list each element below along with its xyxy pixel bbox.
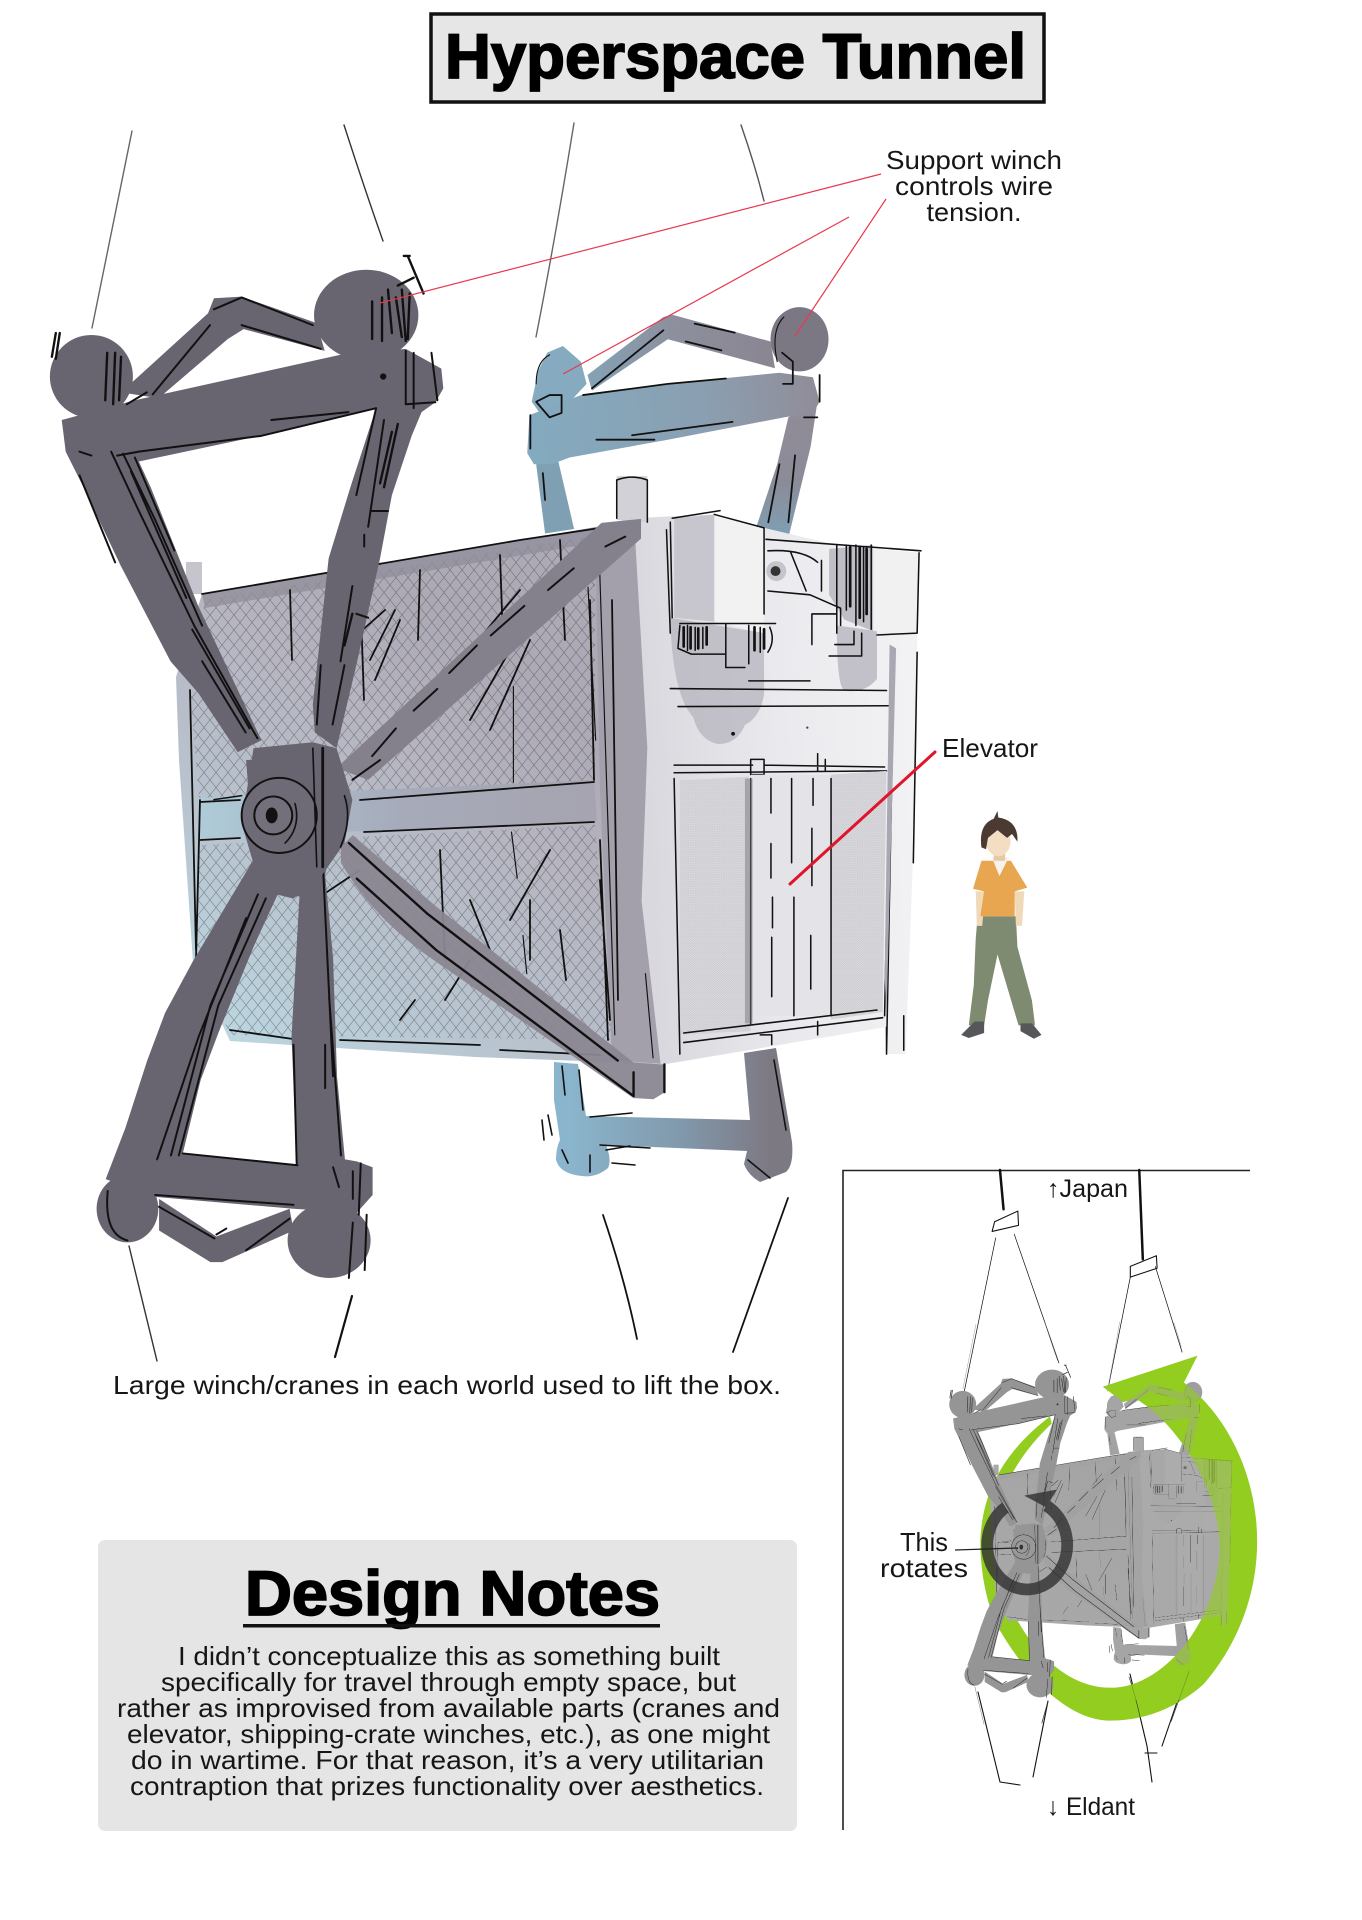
front crane upper frame xyxy=(50,256,443,752)
title: Hyperspace Tunnel xyxy=(445,22,1026,92)
body text: elevator, shipping-crate winches, etc.), as one might xyxy=(127,1719,771,1749)
panel: design notes xyxy=(98,1540,797,1831)
machinery box B xyxy=(837,545,919,635)
leader line xyxy=(955,1548,1018,1550)
heading: design notes: Design Notes xyxy=(245,1559,660,1629)
elevator door center xyxy=(751,775,831,1016)
body text: specifically for travel through empty space, but xyxy=(161,1667,737,1697)
crate right face with elevator door xyxy=(511,476,921,1066)
label: this rotates: This xyxy=(900,1527,948,1557)
crate ink lines xyxy=(190,528,618,1055)
back crane upper section xyxy=(527,307,829,547)
label: Eldant: ↓ Eldant xyxy=(1047,1793,1135,1821)
label: Japan: ↑Japan xyxy=(1047,1175,1128,1203)
shirt xyxy=(973,861,1027,916)
upper frame ink xyxy=(80,297,437,738)
label: support winch: tension. xyxy=(926,197,1022,227)
corner post xyxy=(617,476,647,522)
back crane lower section xyxy=(542,1048,792,1182)
neck and head xyxy=(994,849,1005,861)
lower frame ink xyxy=(107,760,367,1278)
wire cables xyxy=(92,123,788,1361)
callout line: elevator xyxy=(790,752,935,884)
door ink xyxy=(674,648,917,1054)
legs xyxy=(969,916,1035,1025)
green rotation arrow xyxy=(980,1356,1257,1721)
lower diagonal strut xyxy=(341,835,665,1099)
dark hub rotation arrow xyxy=(987,1490,1067,1589)
crate diagonal struts xyxy=(337,519,641,780)
body text xyxy=(117,1641,780,1801)
inset lower cables xyxy=(978,1670,1188,1785)
inset cables xyxy=(964,1170,1182,1391)
caption: Large winch/cranes in each world used to lift the box. xyxy=(113,1370,781,1400)
top rail xyxy=(202,519,643,608)
center hub xyxy=(214,742,352,898)
horizontal band xyxy=(198,780,597,838)
illustration: hyperspace tunnel elevator rig xyxy=(50,123,921,1361)
body text: contraption that prizes functionality over aesthetics. xyxy=(130,1771,764,1801)
corner column xyxy=(595,519,663,1064)
machinery winch xyxy=(766,549,823,595)
machinery hatching xyxy=(666,511,921,775)
hair xyxy=(981,811,1017,849)
callout lines: support winch xyxy=(380,174,886,374)
body text: do in wartime. For that reason, it’s a very utilitarian xyxy=(131,1745,764,1775)
label: support winch: Support winch xyxy=(886,145,1062,175)
label: elevator: Elevator xyxy=(942,733,1038,763)
mesh panels xyxy=(190,535,612,1040)
front crane lower frame xyxy=(97,760,373,1278)
machinery box A xyxy=(674,514,764,633)
body text: I didn’t conceptualize this as something built xyxy=(178,1641,721,1671)
inset grey machine xyxy=(949,1322,1232,1724)
label: this rotates xyxy=(880,1527,968,1583)
panel: inset rotation diagram xyxy=(843,1170,1257,1830)
label: support winch xyxy=(886,145,1062,227)
arms xyxy=(976,891,1024,926)
label: support winch: controls wire xyxy=(895,171,1053,201)
character for scale xyxy=(961,811,1042,1039)
shoes xyxy=(961,1022,1042,1039)
body text: rather as improvised from available parts (cranes and xyxy=(117,1693,780,1723)
label: this rotates: rotates xyxy=(880,1553,968,1583)
crate left face xyxy=(176,519,663,1064)
elevator door mesh xyxy=(680,771,887,1035)
green arrow overlay xyxy=(1103,1356,1258,1700)
shading blobs xyxy=(670,618,764,744)
